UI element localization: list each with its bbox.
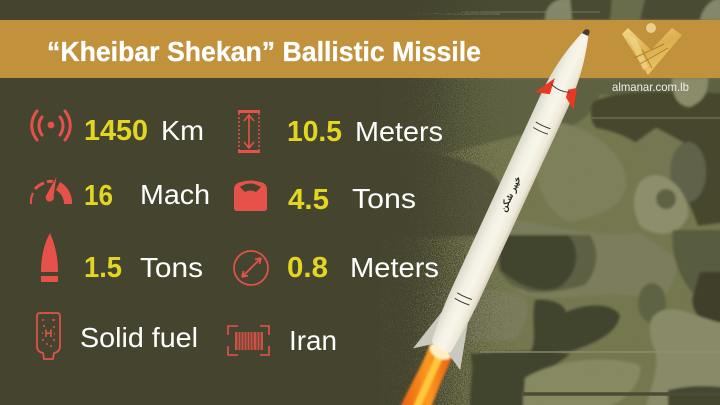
title: “Kheibar Shekan” Ballistic Missile <box>47 36 481 67</box>
missile name: خیبر شکن <box>498 174 524 214</box>
stat: warhead <box>41 233 203 284</box>
title band <box>0 20 720 78</box>
stat: range: Km <box>161 115 204 146</box>
red nose fins <box>535 73 582 110</box>
rocket exhaust flame <box>400 339 455 405</box>
stat: weight <box>234 180 416 216</box>
website label: almanar.com.lb <box>612 80 689 94</box>
icon: barcode <box>228 326 269 355</box>
stat: diameter: 0.8 <box>287 252 328 284</box>
missile <box>413 19 612 370</box>
stat: length: 10.5 <box>287 116 342 148</box>
stat: warhead: 1.5 <box>84 252 122 284</box>
stat: weight: Tons <box>352 183 416 214</box>
stat: length: Meters <box>355 116 443 147</box>
stat: weight: 4.5 <box>288 184 329 216</box>
stat: fuel <box>37 313 198 359</box>
stat: speed: Mach <box>140 179 210 210</box>
stat: origin: Iran <box>289 325 337 356</box>
stat: speed: 16 <box>84 180 113 212</box>
stat: origin <box>228 325 337 356</box>
stat: range <box>32 111 204 147</box>
icon: signal <box>32 111 70 140</box>
rear fins <box>413 303 481 370</box>
nose tip <box>582 28 591 36</box>
stat: warhead: Tons <box>140 252 203 283</box>
stat: range: 1450 <box>84 115 148 147</box>
stat: length <box>238 110 443 153</box>
icon: warhead <box>41 233 58 282</box>
camouflage pattern <box>370 0 720 405</box>
stat: diameter <box>234 251 439 285</box>
body markings <box>453 84 569 306</box>
icon: solid fuel: H <box>45 328 53 340</box>
icon: speedometer <box>31 175 72 204</box>
icon: length <box>238 110 260 153</box>
logo: gold emblem <box>622 23 682 75</box>
icon: weighing scale <box>234 180 267 211</box>
missile body <box>427 25 600 356</box>
icon: diameter <box>234 251 268 285</box>
stat: speed <box>31 175 210 212</box>
icon: solid fuel <box>37 313 60 359</box>
stat: fuel: Solid fuel <box>80 322 198 353</box>
stat: diameter: Meters <box>350 252 439 283</box>
